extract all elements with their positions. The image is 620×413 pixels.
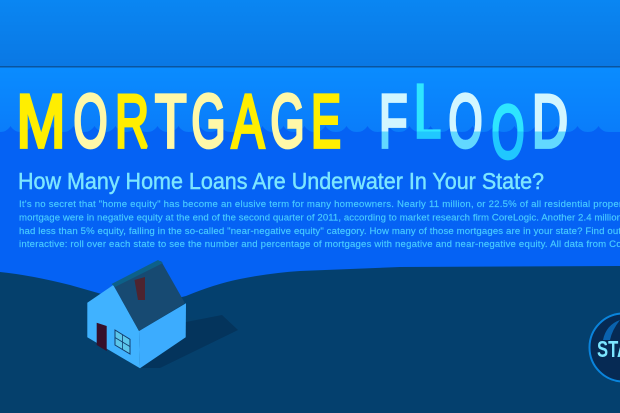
hill: right: [150, 266, 620, 413]
house roof: [113, 261, 185, 331]
house roof ridge: [112, 260, 163, 287]
icon: house: [87, 260, 186, 368]
title: FLOOD: O: [448, 79, 482, 163]
title: MORTGAGE: R: [115, 79, 149, 163]
title: FLOOD: O: [492, 90, 524, 174]
intro paragraph: interactive: roll over each state to see the number and percentage of mortgages with negative and near-negative equity. All data from Cor: [19, 239, 620, 250]
house door: [97, 323, 107, 351]
badge ring: [590, 314, 620, 382]
title: FLOOD: L: [414, 69, 441, 153]
title: MORTGAGE: [16, 79, 341, 163]
intro paragraph: [19, 199, 620, 250]
subtitle: How Many Home Loans Are Underwater In Your State?: [18, 168, 544, 194]
title: MORTGAGE: G: [270, 79, 304, 163]
hill: left: [0, 272, 200, 413]
top band: [0, 0, 620, 66]
title: MORTGAGE: G: [192, 79, 226, 163]
start badge: [590, 314, 620, 382]
title: FLOOD: F: [379, 79, 408, 163]
water with scalloped waterline: [0, 126, 620, 413]
house shadow: [140, 315, 238, 368]
title: MORTGAGE: O: [74, 79, 108, 163]
intro paragraph: had less than 5% equity, falling in the so-called "near-negative equity" category. How many of those mortgages are in your state? Find out: [19, 226, 620, 237]
intro paragraph: It's no secret that "home equity" has become an elusive term for many homeowners. Nearly 11 million, or 22.5% of all residential propert: [19, 199, 620, 210]
intro paragraph: mortgage were in negative equity at the end of the second quarter of 2011, according to market research firm CoreLogic. Another 2.4 million: [19, 212, 620, 224]
title: MORTGAGE: A: [232, 79, 265, 163]
sky panel: [0, 68, 620, 134]
house window: [115, 330, 130, 354]
title: MORTGAGE: E: [311, 79, 341, 163]
badge swoosh: [603, 320, 620, 340]
title: MORTGAGE: T: [155, 79, 186, 163]
house chimney: [134, 277, 145, 300]
house side wall: [139, 303, 186, 368]
house front gable wall: [87, 285, 140, 368]
title: FLOOD: [379, 69, 568, 174]
title: FLOOD: D: [532, 79, 568, 163]
title: MORTGAGE: M: [16, 79, 66, 163]
band divider line: [0, 66, 620, 68]
